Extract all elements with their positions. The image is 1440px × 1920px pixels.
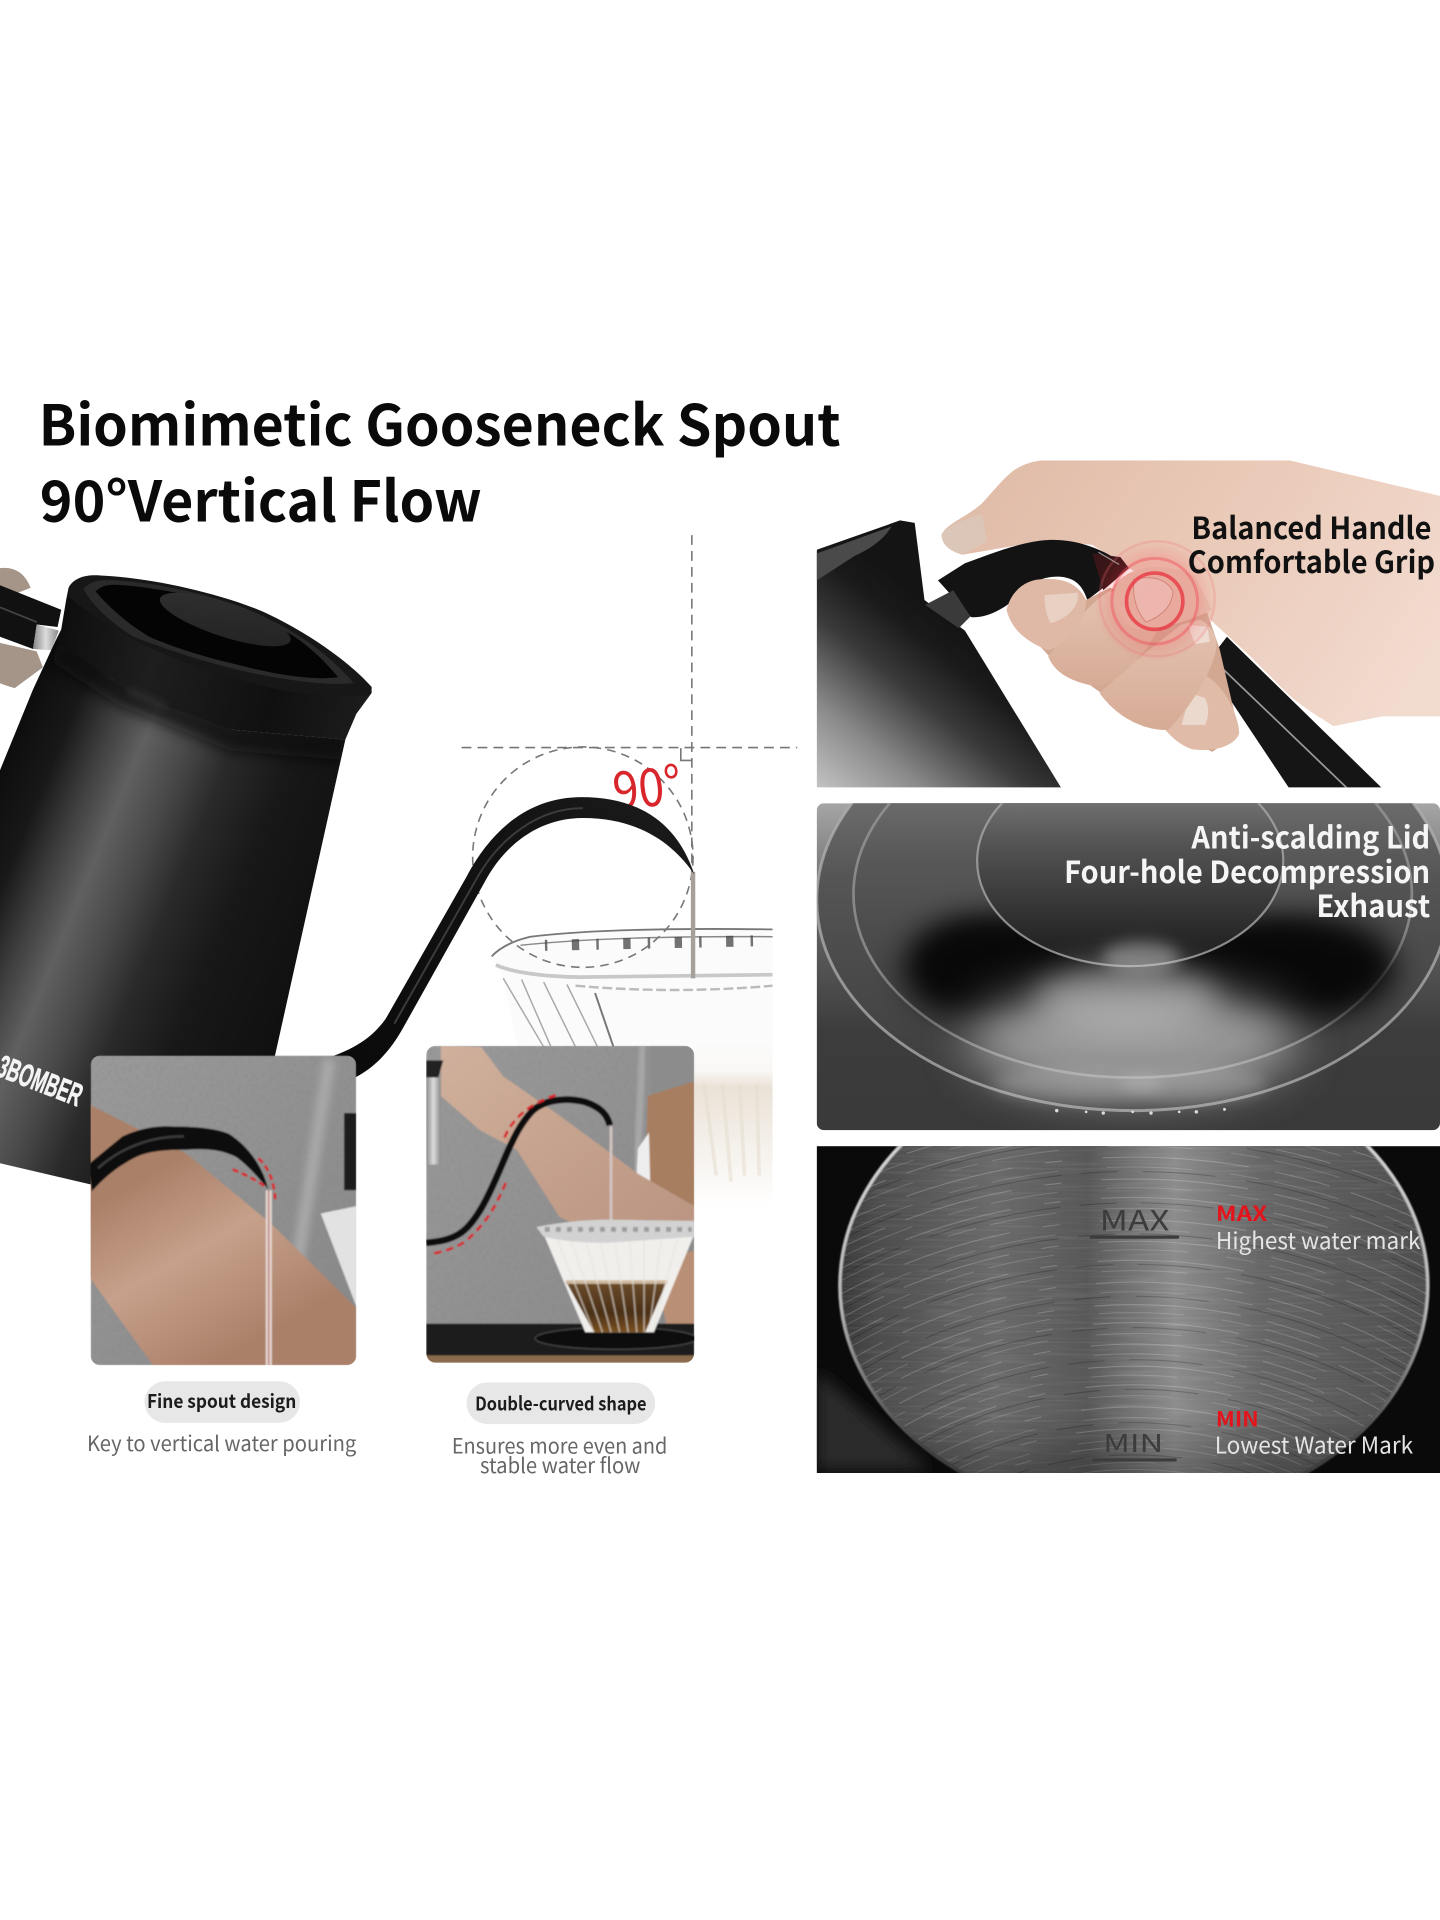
- panel: water level marks: [817, 1056, 1440, 1625]
- lid outer ring: [816, 803, 1440, 1112]
- handle heading: [1189, 514, 1434, 580]
- pill: fine spout design: Fine spout design: [147, 1387, 296, 1414]
- infographic canvas: [0, 400, 1440, 1474]
- upper arm: [646, 1081, 694, 1206]
- body top shadow: [56, 649, 345, 747]
- embossed MIN: MIN: [1103, 1425, 1163, 1460]
- pill: fine spout design: [144, 1381, 300, 1423]
- middle finger: [1048, 591, 1157, 687]
- title: [39, 382, 841, 539]
- kettle in hand: [817, 520, 1062, 789]
- index finger: [1007, 579, 1086, 650]
- scale: [426, 1324, 697, 1363]
- kettle spout: [321, 797, 694, 1078]
- kettle body silver: [426, 1076, 439, 1166]
- red dashed curve: [430, 1095, 557, 1254]
- central lid disc: [976, 803, 1284, 968]
- min label: [1215, 1403, 1413, 1460]
- thumb nail: [942, 514, 987, 555]
- handle heading: Balanced Handle: [1191, 503, 1431, 548]
- caption: double-curved: Ensures more even and: [452, 1429, 667, 1459]
- water stream: [691, 872, 695, 978]
- stainless interior: [833, 1056, 1434, 1625]
- spout close-up: [88, 1126, 268, 1191]
- little finger: [1163, 676, 1239, 750]
- kettle top rim: [69, 575, 372, 696]
- kettle lid knob: [155, 582, 296, 657]
- dark well: [904, 912, 1396, 1019]
- max label: Highest water mark: [1216, 1222, 1421, 1256]
- forearm: [441, 1046, 694, 1232]
- water stream close-up: [266, 1190, 271, 1365]
- caption: double-curved: stable water flow: [480, 1449, 641, 1479]
- angle guide: 90 degree dashed lines and circle: [462, 535, 797, 967]
- panel: anti-scalding lid: [816, 803, 1440, 1130]
- min label: Lowest Water Mark: [1215, 1426, 1413, 1460]
- pill: double-curved shape: Double-curved shape: [475, 1390, 647, 1417]
- title line 2: 90°Vertical Flow: [40, 458, 482, 539]
- thumb: [1113, 567, 1212, 629]
- forearm: [89, 1104, 356, 1365]
- collar highlight: [129, 691, 167, 708]
- steam holes: [1055, 1108, 1226, 1115]
- glass dripper: [536, 1220, 694, 1332]
- kettle collar: [56, 588, 372, 740]
- photo: double-curved: [426, 1046, 697, 1363]
- panel: balanced handle: [817, 460, 1440, 789]
- max label: MAX: [1216, 1197, 1267, 1227]
- photo: fine spout: [88, 1056, 356, 1365]
- lid heading: Exhaust: [1316, 881, 1430, 926]
- caption: fine spout: Key to vertical water pouring: [87, 1427, 357, 1457]
- red pressure rings: [1093, 540, 1216, 662]
- embossed MAX: MAX: [1100, 1199, 1169, 1240]
- lid heading: [1066, 824, 1430, 918]
- pill: double-curved shape: [467, 1382, 655, 1424]
- lid heading: Anti-scalding Lid: [1190, 813, 1430, 858]
- handle grip: [925, 540, 1382, 789]
- ring finger: [1100, 620, 1217, 730]
- 90 degree label: 90°: [609, 743, 685, 826]
- embossed MIN: [1092, 1425, 1177, 1462]
- steam: [967, 942, 1298, 1101]
- water stream: [610, 1127, 612, 1224]
- lid second ring: [852, 803, 1414, 1079]
- pour-over dripper in background: [491, 929, 773, 1206]
- kettle: [0, 568, 372, 1218]
- caption: double-curved: [452, 1429, 667, 1479]
- kettle body: [0, 639, 345, 1218]
- kettle left hand and handle: [0, 568, 61, 688]
- max label: [1216, 1197, 1421, 1256]
- red dashed curve: [233, 1158, 276, 1202]
- fist base: [1007, 579, 1239, 752]
- lid heading: Four-hole Decompression: [1064, 847, 1430, 892]
- spout side view: [426, 1100, 610, 1243]
- embossed MAX: [1090, 1199, 1179, 1240]
- min label: MIN: [1216, 1403, 1259, 1433]
- back of hand: [942, 460, 1440, 726]
- title line 1: Biomimetic Gooseneck Spout: [39, 382, 841, 463]
- fingers: [1007, 567, 1239, 752]
